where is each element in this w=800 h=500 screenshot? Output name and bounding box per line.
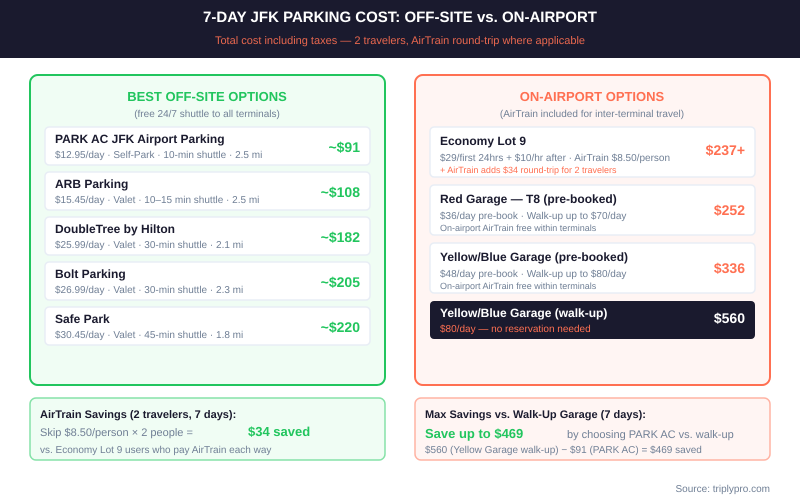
card: DoubleTree: [45, 217, 370, 255]
card: DoubleTree: DoubleTree by Hilton: [55, 222, 175, 236]
header banner: [0, 0, 800, 58]
subtitle: Total cost including taxes — 2 travelers, AirTrain round-trip where applicable: [215, 35, 585, 47]
card: Safe Park: [45, 307, 370, 345]
card: Bolt Parking: $26.99/day · Valet · 30-min shuttle · 2.3 mi: [55, 285, 243, 296]
card: Red Garage: [430, 185, 755, 235]
card: ARB Parking: ~$108: [321, 184, 360, 200]
card: Red Garage: $36/day pre-book · Walk-up up to $70/day: [440, 211, 626, 222]
card: Economy Lot 9: $29/first 24hrs + $10/hr after · AirTrain $8.50/person: [440, 153, 670, 164]
card: DoubleTree: ~$182: [321, 229, 360, 245]
card: Safe Park: $30.45/day · Valet · 45-min shuttle · 1.8 mi: [55, 330, 243, 341]
callout: AirTrain savings: vs. Economy Lot 9 users who pay AirTrain each way: [40, 445, 271, 456]
panel: best off-site options: [30, 75, 385, 385]
card: Yellow/Blue Garage pre-booked: $48/day pre-book · Walk-up up to $80/day: [440, 269, 626, 280]
panel: on-airport options: [415, 75, 770, 385]
callout: AirTrain savings: AirTrain Savings (2 travelers, 7 days):: [40, 409, 236, 421]
callout: AirTrain savings: [30, 398, 385, 460]
card: Yellow/Blue Garage walk-up: $560: [714, 310, 745, 326]
callout: max savings: [415, 398, 770, 460]
card: PARK AC: [45, 127, 370, 165]
card: ARB Parking: [45, 172, 370, 210]
card: Red Garage: Red Garage — T8 (pre-booked): [440, 192, 617, 206]
card: Economy Lot 9: [430, 127, 755, 177]
callout: max savings: $560 (Yellow Garage walk-up) − $91 (PARK AC) = $469 saved: [425, 445, 702, 456]
card: Safe Park: Safe Park: [55, 312, 110, 326]
card: Economy Lot 9: + AirTrain adds $34 round-trip for 2 travelers: [440, 165, 617, 175]
panel heading: on-airport: ON-AIRPORT OPTIONS: [520, 89, 665, 104]
card: PARK AC: ~$91: [328, 139, 360, 155]
callout: max savings: Save up to $469: [425, 426, 523, 441]
panel note: on-airport: (AirTrain included for inter-terminal travel): [500, 109, 684, 120]
card: Bolt Parking: ~$205: [321, 274, 360, 290]
card: Bolt Parking: Bolt Parking: [55, 267, 126, 281]
card: Economy Lot 9: Economy Lot 9: [440, 134, 526, 148]
callout: AirTrain savings: $34 saved: [248, 424, 310, 439]
card: Safe Park: ~$220: [321, 319, 360, 335]
card: Yellow/Blue Garage pre-booked: Yellow/Blue Garage (pre-booked): [440, 250, 628, 264]
card: Yellow/Blue Garage pre-booked: On-airport AirTrain free within terminals: [440, 281, 597, 291]
card: Yellow/Blue Garage walk-up: $80/day — no reservation needed: [440, 324, 591, 335]
callout: max savings: Max Savings vs. Walk-Up Garage (7 days):: [425, 409, 646, 421]
card: DoubleTree: $25.99/day · Valet · 30-min shuttle · 2.1 mi: [55, 240, 243, 251]
card: Yellow/Blue Garage pre-booked: [430, 243, 755, 293]
card: PARK AC: $12.95/day · Self-Park · 10-min shuttle · 2.5 mi: [55, 150, 262, 161]
title: 7-DAY JFK PARKING COST: OFF-SITE vs. ON-AIRPORT: [203, 9, 597, 26]
card: Yellow/Blue Garage walk-up: [430, 301, 755, 339]
card: Red Garage: On-airport AirTrain free within terminals: [440, 223, 597, 233]
card: Yellow/Blue Garage pre-booked: $336: [714, 260, 745, 276]
callout: AirTrain savings: Skip $8.50/person × 2 people =: [40, 427, 193, 439]
card: Bolt Parking: [45, 262, 370, 300]
card: Yellow/Blue Garage walk-up: Yellow/Blue Garage (walk-up): [440, 306, 607, 320]
card: ARB Parking: $15.45/day · Valet · 10–15 min shuttle · 2.5 mi: [55, 195, 259, 206]
card: Economy Lot 9: $237+: [706, 142, 745, 158]
callout: max savings: by choosing PARK AC vs. walk-up: [567, 429, 734, 441]
panel note: off-site: (free 24/7 shuttle to all terminals): [134, 109, 280, 120]
card: Red Garage: $252: [714, 202, 745, 218]
card: ARB Parking: ARB Parking: [55, 177, 128, 191]
card: PARK AC: PARK AC JFK Airport Parking: [55, 132, 225, 146]
source note: Source: triplypro.com: [676, 484, 770, 495]
panel heading: off-site: BEST OFF-SITE OPTIONS: [127, 89, 287, 104]
